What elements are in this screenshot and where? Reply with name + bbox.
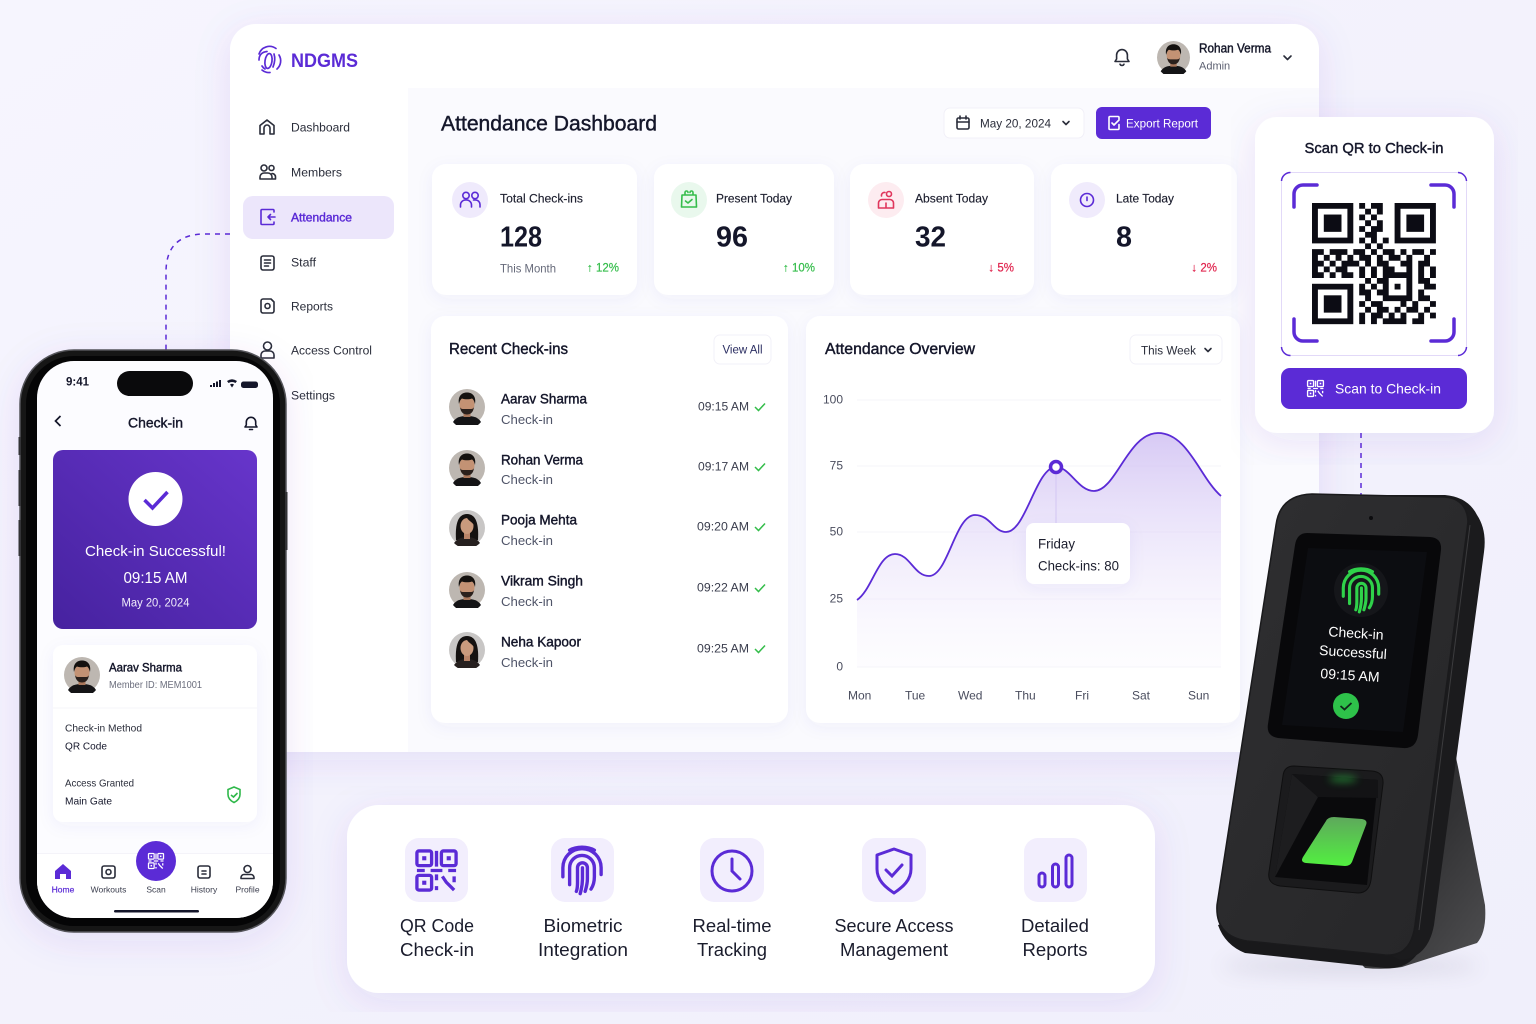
panel: Attendance Overview: Attendance Overview	[825, 341, 976, 358]
stat card: Absent Today: 32	[915, 221, 946, 253]
stat card: Present Today	[654, 164, 834, 295]
success card: May 20, 2024	[122, 597, 190, 609]
phone screen	[37, 361, 273, 918]
area chart: 25	[830, 591, 843, 605]
success card: 09:15 AM	[124, 570, 188, 587]
status bar: 9:41	[66, 376, 90, 388]
nav: Members	[260, 165, 342, 179]
nav: Access Control: Access Control	[291, 343, 372, 357]
bottom navigation: Scan	[146, 884, 166, 894]
member details card: Member ID: MEM1001	[109, 680, 202, 691]
area chart: 75	[830, 458, 843, 472]
row: Vikram Singh: Check-in	[501, 594, 553, 609]
panel: feature strip	[347, 805, 1155, 993]
panel: Scan QR to Check-in: Scan QR to Check-in	[1304, 140, 1444, 157]
stat card: Present Today: 96	[716, 221, 748, 253]
nav: Attendance (active): Attendance	[291, 210, 352, 224]
bottom navigation	[37, 841, 273, 918]
stat card: Absent Today: Absent Today	[915, 191, 989, 205]
row: Neha Kapoor: Neha Kapoor	[501, 633, 581, 649]
area chart: Sat	[1132, 688, 1151, 702]
area chart: 100	[823, 392, 843, 406]
nav: Dashboard	[260, 120, 350, 134]
row: Aarav Sharma: Check-in	[501, 412, 553, 427]
panel: top bar	[408, 24, 1319, 88]
row: Rohan Verma	[449, 450, 765, 490]
stat card: Total Check-ins: 128	[500, 221, 542, 253]
device stand	[1300, 720, 1485, 969]
row: Rohan Verma: Rohan Verma	[501, 451, 583, 467]
stat card: Late Today: ↓ 2%	[1191, 262, 1217, 274]
icon: notification bell	[1115, 50, 1129, 65]
device body side	[1310, 495, 1485, 960]
button: View All	[714, 335, 771, 364]
bottom navigation: Workouts	[91, 884, 126, 894]
dropdown: This Week: This Week	[1141, 343, 1197, 357]
device screen: 09:15 AM	[1320, 665, 1380, 685]
connector: dashboard to phone	[166, 234, 230, 350]
nav: Reports	[261, 299, 333, 313]
feature: QR Code Check-in: QR Code	[400, 915, 474, 936]
feature: Biometric Integration	[538, 838, 628, 960]
row: Neha Kapoor	[449, 632, 765, 671]
device: biometric terminal	[1217, 494, 1485, 974]
feature: QR Code Check-in: Check-in	[400, 939, 474, 960]
member details card: Check-in Method	[65, 722, 142, 734]
member details card	[53, 645, 257, 822]
QR code	[1312, 206, 1436, 321]
nav: Staff: Staff	[291, 255, 317, 269]
member details card: QR Code	[65, 740, 107, 752]
row: Vikram Singh: 09:22 AM	[697, 580, 749, 594]
row: Aarav Sharma	[449, 389, 765, 429]
bottom navigation: Home	[52, 884, 75, 894]
area chart: Wed	[958, 688, 982, 702]
stat card: Total Check-ins: Total Check-ins	[500, 191, 583, 205]
device screen: Successful	[1319, 642, 1387, 662]
nav: Staff	[261, 255, 317, 270]
nav: Reports: Reports	[291, 299, 333, 313]
user profile	[1157, 41, 1291, 77]
stat card: Late Today: 8	[1116, 221, 1132, 253]
stat card: Late Today: Late Today	[1116, 191, 1175, 205]
chart tooltip	[1026, 523, 1130, 584]
nav: Members: Members	[291, 165, 342, 179]
nav: Settings: Settings	[291, 388, 335, 402]
row: Pooja Mehta	[449, 510, 765, 549]
user profile: Admin	[1199, 60, 1230, 72]
nav: Attendance (active)	[243, 196, 394, 239]
feature: QR Code Check-in	[400, 838, 474, 960]
stat card: Total Check-ins: This Month	[500, 261, 556, 275]
area chart: 50	[830, 524, 843, 538]
stat card: Total Check-ins: ↑ 12%	[587, 262, 619, 274]
feature: Real-time Tracking: Real-time	[692, 915, 772, 936]
date picker	[944, 108, 1084, 138]
heading: Attendance Dashboard: Attendance Dashboard	[441, 111, 657, 135]
stat card: Total Check-ins	[432, 164, 637, 295]
row: Neha Kapoor: Check-in	[501, 655, 553, 670]
stat card: Late Today	[1051, 164, 1237, 295]
member details card: Aarav Sharma	[109, 660, 182, 674]
success card: Check-in Successful!	[85, 543, 226, 560]
chart tooltip: Friday	[1038, 535, 1075, 551]
feature: Biometric Integration: Integration	[538, 939, 628, 960]
area chart: 0	[836, 659, 843, 673]
row: Pooja Mehta: Check-in	[501, 533, 553, 548]
device screen	[1268, 533, 1441, 748]
row: Rohan Verma: 09:17 AM	[698, 459, 749, 473]
bottom navigation: Profile	[235, 884, 260, 894]
area chart	[823, 392, 1221, 702]
logo: NDGMS	[291, 51, 358, 72]
area chart: Thu	[1015, 688, 1036, 702]
button: Scan to Check-in	[1281, 368, 1467, 409]
panel: Recent Check-ins	[431, 316, 788, 723]
stat card: Absent Today	[850, 164, 1034, 295]
button: View All: View All	[722, 344, 763, 356]
icon: access shield	[228, 787, 240, 802]
feature: Secure Access Management: Management	[840, 939, 948, 960]
button: Export Report: Export Report	[1126, 116, 1199, 130]
chart tooltip: Check-ins: 80	[1038, 557, 1119, 573]
row: Vikram Singh: Vikram Singh	[501, 572, 583, 588]
status bar	[66, 371, 258, 396]
connector: QR card to device	[1360, 433, 1362, 496]
panel: dashboard window	[230, 24, 1319, 752]
QR frame	[1282, 172, 1466, 356]
row: Vikram Singh	[449, 572, 765, 612]
member details card: Main Gate	[65, 795, 112, 807]
area chart: Sun	[1188, 688, 1209, 702]
row: Rohan Verma: Check-in	[501, 472, 553, 487]
phone header	[56, 414, 257, 430]
stat card: Present Today: ↑ 10%	[783, 262, 815, 274]
panel: sidebar	[230, 24, 408, 752]
panel: Scan QR to Check-in	[1255, 117, 1494, 433]
feature: Secure Access Management: Secure Access	[834, 915, 954, 936]
member details card: Access Granted	[65, 777, 134, 789]
button: Export Report	[1096, 107, 1211, 139]
area chart: Fri	[1075, 688, 1089, 702]
feature: Secure Access Management	[834, 838, 954, 960]
feature: Detailed Reports: Detailed	[1021, 915, 1089, 936]
row: Aarav Sharma: Aarav Sharma	[501, 390, 587, 406]
fingerprint sensor	[1269, 766, 1383, 893]
feature: Biometric Integration: Biometric	[544, 915, 622, 936]
panel: Attendance Overview	[806, 316, 1240, 723]
button: Scan to Check-in: Scan to Check-in	[1335, 380, 1441, 396]
date picker: May 20, 2024	[980, 116, 1051, 130]
feature: Detailed Reports	[1021, 838, 1089, 960]
phone header: Check-in	[128, 414, 183, 430]
area chart: Mon	[848, 688, 871, 702]
dropdown: This Week	[1130, 335, 1222, 364]
feature: Detailed Reports: Reports	[1022, 939, 1088, 960]
row: Neha Kapoor: 09:25 AM	[697, 641, 749, 655]
row: Pooja Mehta: 09:20 AM	[697, 519, 749, 533]
nav: Dashboard: Dashboard	[291, 120, 350, 134]
logo	[259, 46, 358, 73]
success card	[53, 450, 257, 629]
stat card: Present Today: Present Today	[716, 191, 793, 205]
area chart: Tue	[905, 688, 926, 702]
phone	[18, 350, 288, 932]
device front face	[1217, 494, 1468, 955]
bottom navigation: History	[191, 884, 218, 894]
row: Pooja Mehta: Pooja Mehta	[501, 511, 577, 527]
nav: Access Control	[261, 342, 372, 358]
panel: Recent Check-ins: Recent Check-ins	[449, 341, 568, 358]
device base lip	[1218, 900, 1420, 968]
stat card: Absent Today: ↓ 5%	[988, 262, 1014, 274]
user profile: Rohan Verma	[1199, 41, 1271, 55]
feature: Real-time Tracking: Tracking	[697, 939, 767, 960]
feature: Real-time Tracking	[692, 838, 772, 960]
row: Aarav Sharma: 09:15 AM	[698, 399, 749, 413]
device screen: Check-in	[1328, 623, 1384, 643]
